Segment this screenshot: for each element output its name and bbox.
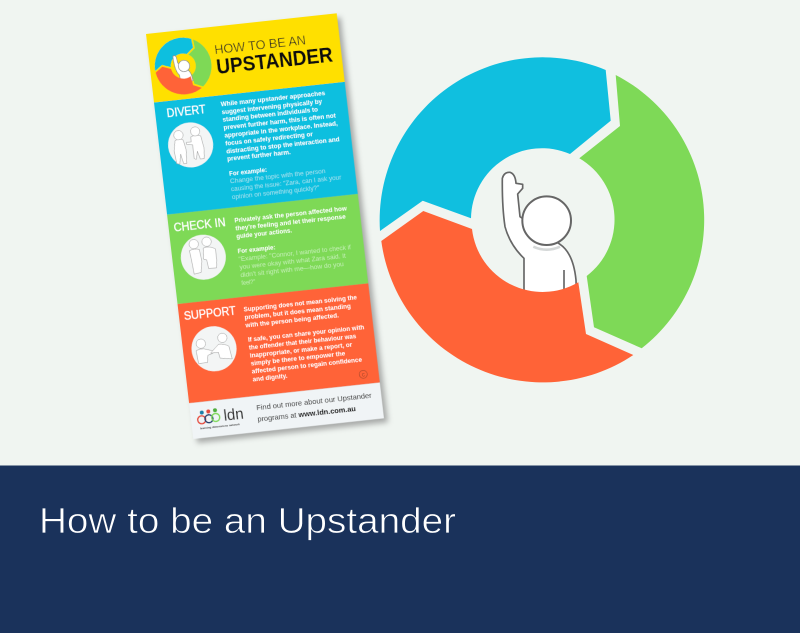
text: divert body: standing between individuals to <box>222 107 319 124</box>
segment: green check in <box>579 75 704 348</box>
text: find out more: programs at www.ldn.com.au <box>257 404 357 424</box>
logo: ldn: ldn <box>223 406 245 425</box>
panel: footer <box>189 383 384 439</box>
panel: yellow header <box>146 13 345 102</box>
text: check in example: "Example: "Connor, I wanted to check if <box>238 244 352 263</box>
text: support body: problem, but it does mean standing <box>244 303 352 321</box>
text: divert example: For example: <box>229 167 267 178</box>
panel: check in <box>167 194 368 304</box>
text: support body <box>242 294 360 330</box>
text: check in example: feel?" <box>241 278 256 287</box>
text: check in example: didn't sit right with me—how do you <box>240 261 345 279</box>
title: How to be an Upstander <box>39 500 456 541</box>
segment: red support <box>381 211 633 382</box>
text: check in body: Privately ask the person affected how <box>234 205 347 224</box>
text: divert example: Change the topic with the person <box>230 168 327 185</box>
text: check in example: you were okay with what Zara said. It <box>239 253 347 271</box>
infographic poster <box>146 13 384 439</box>
text: support advice: and dignity. <box>252 372 288 383</box>
text: divert body: focus on safely redirecting or <box>225 131 314 147</box>
text: check in example <box>237 236 354 287</box>
text: divert example: causing the issue: "Zara, can I ask your <box>231 174 342 193</box>
text: divert example: opinion on something quickly?" <box>232 185 320 201</box>
panel: divert <box>154 82 358 215</box>
logo: ldn <box>197 405 245 431</box>
heading: check in: CHECK IN <box>173 215 226 235</box>
copyright mark: c <box>362 372 365 379</box>
segment: blue divert <box>380 57 611 231</box>
title: upstander: UPSTANDER <box>215 44 334 79</box>
text: divert body: suggest intervening physically by <box>221 98 323 116</box>
text: support advice: affected person to regain confidence <box>251 356 363 375</box>
text: divert body: distracting to stop the interaction and <box>226 136 340 155</box>
text: find out more: Find out more about our Upstander <box>256 391 373 412</box>
heading: support: SUPPORT <box>183 303 237 323</box>
text: support advice <box>248 324 369 383</box>
text: support advice: If safe, you can share your opinion with <box>248 324 365 344</box>
text: check in body: they're feeling and let their response <box>235 213 347 232</box>
icon: two people, support <box>189 324 239 374</box>
text: divert example <box>229 159 343 201</box>
text: support body: with the person being affected. <box>244 312 340 330</box>
text: divert body: appropriate in the workplace. Instead, <box>224 120 338 140</box>
copyright mark <box>359 370 368 379</box>
title: how to be an: HOW TO BE AN <box>214 32 307 57</box>
heading: divert: DIVERT <box>166 102 207 120</box>
icon: two people, check in <box>178 232 228 282</box>
text: divert body <box>220 89 341 163</box>
text: divert body: prevent further harm, this is often not <box>223 113 336 132</box>
text: support advice: simply be there to empower the <box>250 350 346 367</box>
icon: two people, divert <box>166 120 216 170</box>
text: support body: Supporting does not mean solving the <box>243 294 358 314</box>
icon: person raising hand <box>502 172 577 303</box>
text: check in body: guide your actions. <box>236 227 293 240</box>
panel: navy title band <box>0 466 800 633</box>
text: divert body: While many upstander approaches <box>220 90 326 108</box>
text: support advice: the offender that their behaviour was <box>249 333 357 351</box>
text: check in body <box>234 205 349 240</box>
text: divert body: prevent further harm. <box>227 149 292 163</box>
text: check in example: For example: <box>237 244 276 255</box>
text: support advice: inappropriate, or make a report, or <box>249 341 353 359</box>
poster shadow <box>150 17 388 443</box>
header wheel logo <box>152 35 215 97</box>
logo: ldn: learning dimensions network <box>200 422 240 431</box>
panel: support <box>178 283 380 403</box>
large upstander wheel <box>380 57 704 382</box>
text: find out more <box>256 391 374 424</box>
